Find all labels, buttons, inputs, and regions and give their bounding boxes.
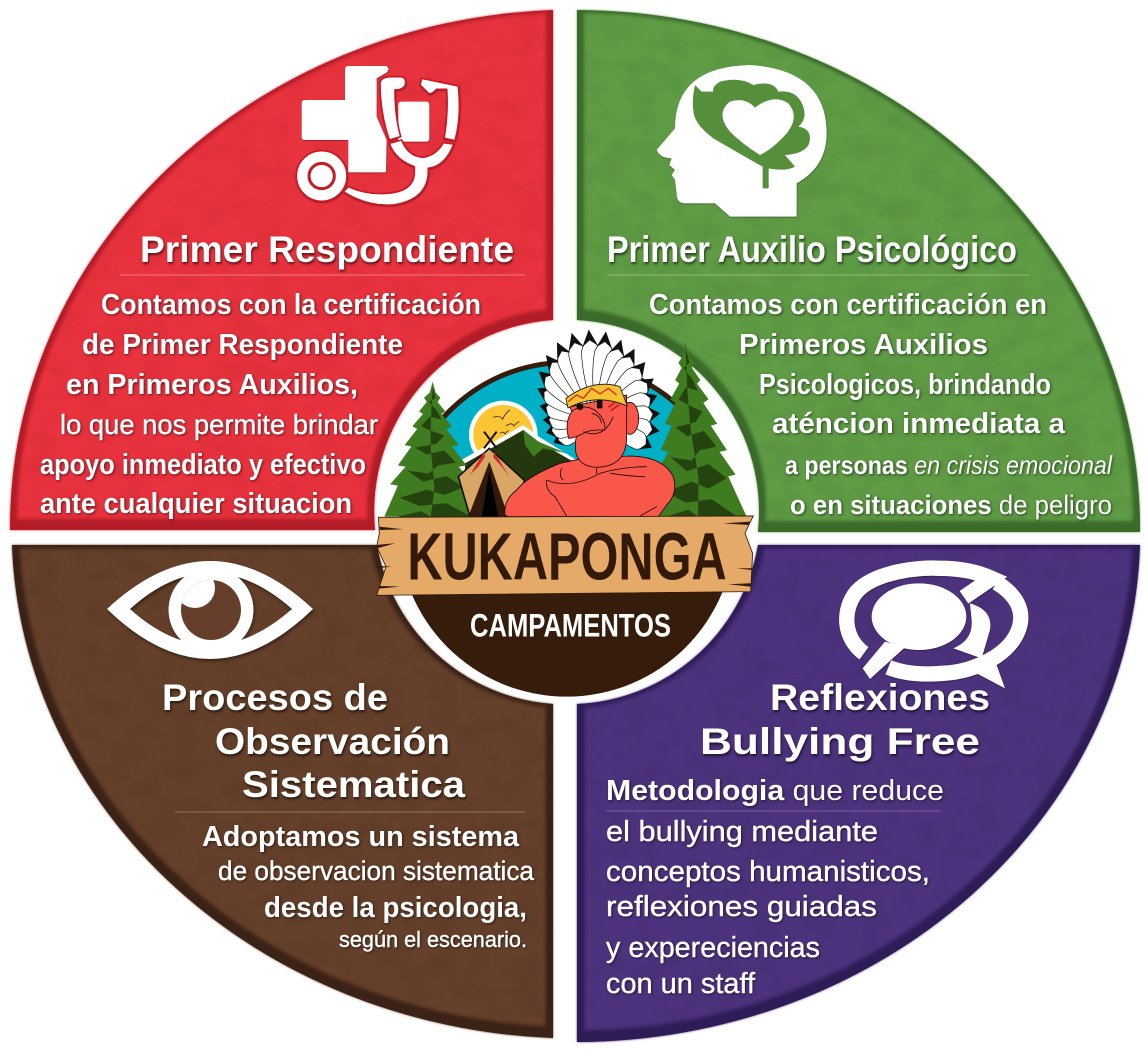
text: Primer Respondiente description: en Primeros Auxilios, xyxy=(66,369,358,401)
icon: medical cross and stethoscope xyxy=(296,66,459,205)
illustration: mountain xyxy=(458,425,577,517)
text: observation description xyxy=(202,821,535,952)
text: Primer Auxilio description: Contamos con certificación en xyxy=(649,289,1047,321)
heading: Reflexiones Bullying Free: Reflexiones xyxy=(770,677,990,718)
text: Primer Auxilio description: a personas en crisis emocional xyxy=(785,450,1113,480)
icon: eye xyxy=(107,561,313,659)
text: CAMPAMENTOS: CAMPAMENTOS xyxy=(470,607,671,644)
text: Primer Auxilio description: Psicologicos, brindando xyxy=(759,369,1051,401)
text: Primer Respondiente description: de Primer Respondiente xyxy=(82,329,403,361)
text: observation description: desde la psicologia, xyxy=(264,892,527,924)
tree: right pine xyxy=(638,342,747,517)
panel: Primer Respondiente xyxy=(0,0,560,540)
text: Primer Auxilio description xyxy=(649,289,1113,520)
text: Primer Respondiente description xyxy=(40,289,481,520)
text: Primer Auxilio description: o en situaciones de peligro xyxy=(790,490,1112,520)
logo: Kukaponga Campamentos xyxy=(376,330,753,697)
text: Primer Respondiente description: Contamos con la certificación xyxy=(101,289,481,321)
illustration: chief with crossed arms xyxy=(505,384,675,517)
text: observation description: Adoptamos un sistema xyxy=(202,821,520,853)
heading: Procesos de Observación Sistematica: Procesos de xyxy=(162,677,388,718)
panel: Primer Auxilio Psicológico xyxy=(570,0,1148,540)
plank sign xyxy=(376,516,753,595)
heading: Procesos de Observación Sistematica: Sistematica xyxy=(242,764,465,805)
heading: Procesos de Observación Sistematica xyxy=(162,677,465,805)
text: Primer Auxilio description: Primeros Auxilios xyxy=(739,329,988,361)
text: Primer Auxilio description: aténcion inmediata a xyxy=(772,408,1066,440)
icon: head with heart xyxy=(657,65,827,217)
panel: Reflexiones Bullying Free xyxy=(570,540,1148,1050)
text: Primer Respondiente description: apoyo inmediato y efectivo xyxy=(40,449,366,481)
text: bullying description xyxy=(606,775,944,1000)
text: bullying description: con un staff xyxy=(606,968,756,1000)
heading: Procesos de Observación Sistematica: Observación xyxy=(215,721,450,762)
text: KUKAPONGA: KUKAPONGA xyxy=(407,520,727,594)
panel: Procesos de Observación Sistematica xyxy=(0,540,560,1050)
text: bullying description: y expereciencias xyxy=(606,932,820,964)
heading: Primer Auxilio Psicológico: Primer Auxilio Psicológico xyxy=(607,229,1017,270)
heading: Reflexiones Bullying Free: Bullying Free xyxy=(700,721,980,762)
heading: Reflexiones Bullying Free xyxy=(700,677,990,762)
text: observation description: según el escenario. xyxy=(339,927,527,952)
text: bullying description: Metodologia que reduce xyxy=(606,775,944,807)
heading: Primer Respondiente: Primer Respondiente xyxy=(140,229,514,270)
text: bullying description: reflexiones guiadas xyxy=(606,891,877,923)
text: bullying description: conceptos humanisticos, xyxy=(606,856,930,888)
text: Primer Respondiente description: ante cualquier situacion xyxy=(40,488,352,520)
illustration: feather headdress xyxy=(533,330,661,456)
text: Primer Respondiente description: lo que nos permite brindar xyxy=(60,409,378,440)
illustration: sun and birds xyxy=(469,401,538,469)
text: bullying description: el bullying mediante xyxy=(606,816,878,848)
tree: left pine xyxy=(384,382,481,517)
text: observation description: de observacion sistematica xyxy=(218,856,535,886)
icon: speech bubbles xyxy=(847,568,1021,688)
illustration: tipi tent xyxy=(458,432,527,517)
